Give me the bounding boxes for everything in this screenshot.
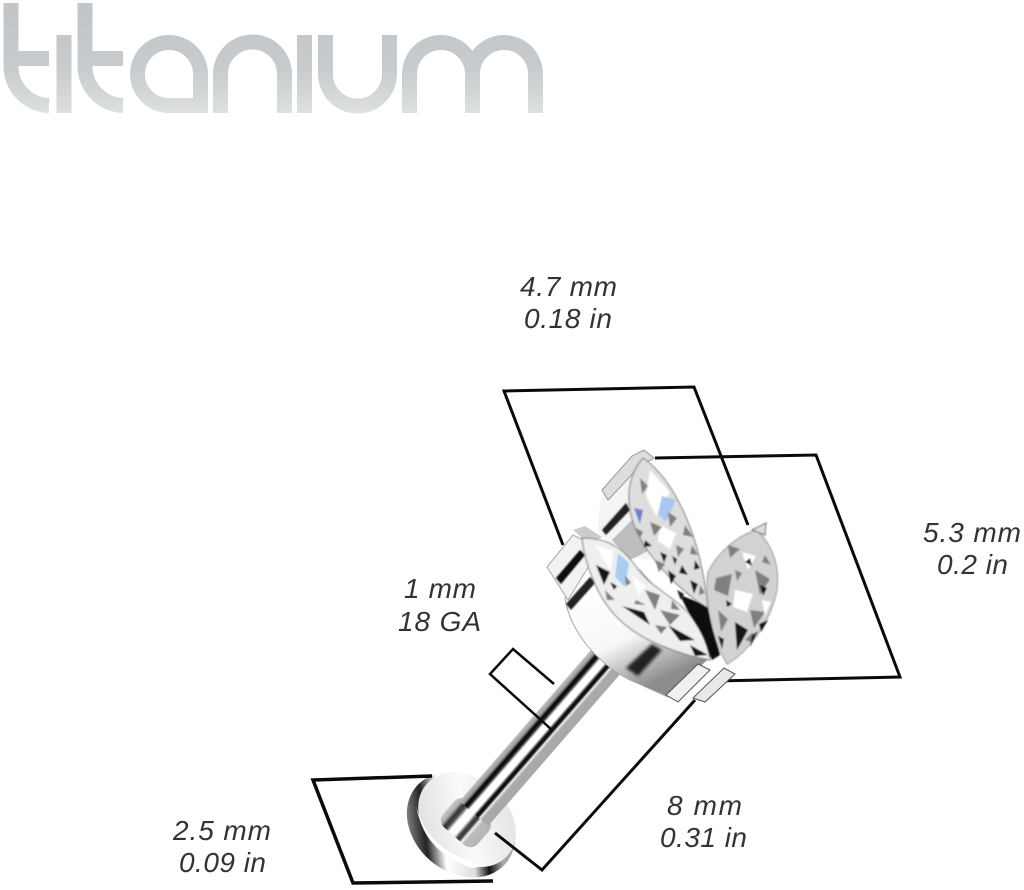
label: 4.7 mm: 0.18 in [524, 303, 612, 334]
dimension box: head width 4.7 mm [504, 387, 748, 545]
label: 1 mm: 1 mm [404, 573, 476, 604]
flat back disc [386, 751, 536, 890]
label: 2.5 mm [172, 815, 271, 878]
gem: right pear [707, 523, 778, 664]
wedge between stones [680, 595, 720, 660]
gem: middle marquise [629, 458, 708, 608]
shaft [459, 643, 626, 826]
dimension box: head height 5.3 mm [655, 455, 900, 681]
label: 5.3 mm: 0.2 in [937, 549, 1008, 580]
label: 4.7 mm [520, 271, 617, 334]
label: 8 mm [660, 790, 747, 853]
label: 2.5 mm: 2.5 mm [172, 815, 271, 846]
dimension box: length 8 mm [495, 700, 695, 870]
logo: titanium [11, 3, 535, 113]
shaft collar [437, 794, 495, 851]
dimension box: disc 2.5 mm [313, 776, 493, 883]
labret pin [386, 450, 735, 890]
label: 5.3 mm: 5.3 mm [923, 517, 1021, 548]
label: 5.3 mm [923, 517, 1021, 580]
label: 1 mm [398, 573, 481, 637]
label: 1 mm: 18 GA [398, 606, 481, 637]
gem: left marquise [582, 538, 710, 660]
dimension box: gauge 1 mm [490, 649, 554, 730]
head metal setting [547, 450, 735, 702]
label: 4.7 mm: 4.7 mm [520, 271, 617, 302]
label: 8 mm: 8 mm [667, 790, 742, 821]
label: 2.5 mm: 0.09 in [179, 847, 266, 878]
label: 8 mm: 0.31 in [660, 822, 747, 853]
